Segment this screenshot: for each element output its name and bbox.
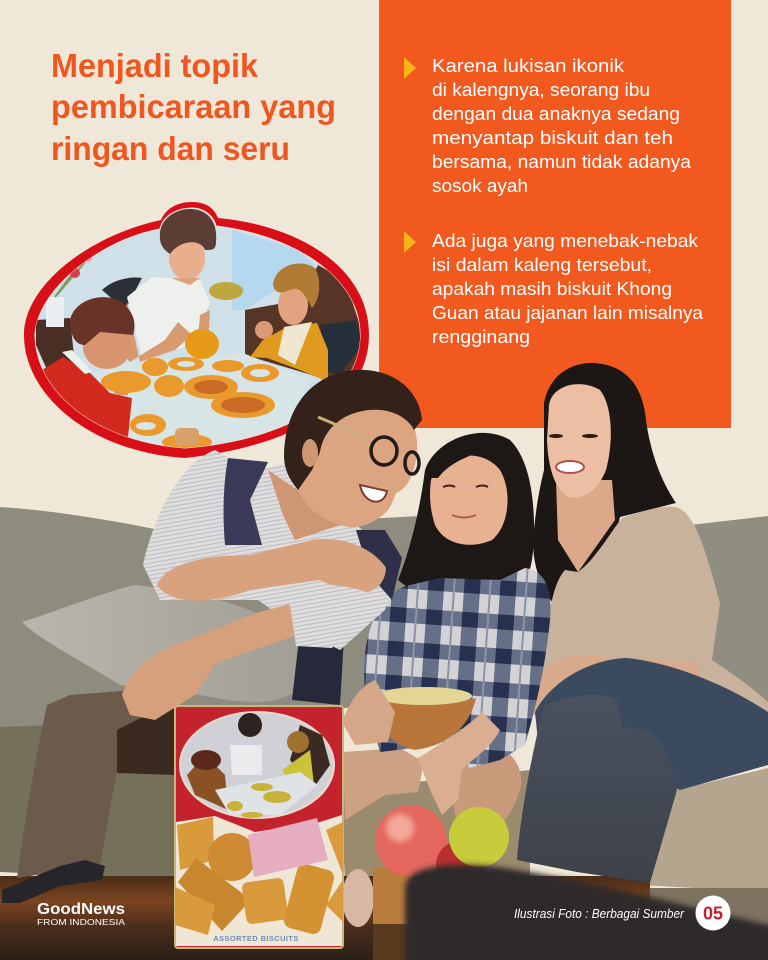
smile (360, 485, 387, 502)
icon: yellow triangle bullet (404, 231, 416, 253)
text block: first point: bersama, namun tidak adanya (432, 151, 692, 172)
sofa back right (690, 516, 768, 740)
text block: second point: rengginang (432, 326, 530, 347)
pink wafer (248, 818, 328, 877)
girl in yellow cardigan (250, 263, 328, 382)
vase and flowers (46, 254, 92, 327)
eyes (549, 434, 598, 438)
mother (123, 209, 216, 362)
hair fringe (425, 435, 512, 478)
lower arm and hand (122, 603, 303, 720)
jeans thigh (535, 658, 768, 790)
wall panel (232, 230, 315, 310)
biscuits and plates (101, 357, 279, 450)
table (0, 876, 650, 960)
plaid dress (364, 568, 551, 768)
glasses (318, 417, 419, 474)
panel: orange text background (379, 0, 731, 428)
text block: first point: menyantap biskuit dan teh (432, 127, 673, 148)
arm to knee (418, 712, 500, 815)
text block: first point: Karena lukisan ikonik (432, 55, 625, 76)
painted scene (36, 209, 365, 450)
face (547, 384, 611, 498)
blurred foreground screen (405, 865, 768, 960)
popcorn bowl (342, 680, 476, 750)
legs (343, 748, 424, 820)
text block: second point (404, 230, 704, 347)
logo: GoodNews (37, 901, 125, 927)
dark vest lower (292, 620, 345, 705)
hair (398, 433, 534, 597)
face (430, 456, 508, 545)
face (290, 403, 417, 527)
neck (268, 470, 340, 540)
dark furniture left (36, 318, 75, 372)
biscuit area (176, 815, 342, 946)
back hair (533, 363, 676, 612)
title: pembicaraan yang (51, 88, 336, 125)
mouth (556, 461, 584, 473)
man (122, 370, 422, 720)
navy vest (224, 458, 268, 545)
boy in red (42, 297, 134, 437)
text block: second point: isi dalam kaleng tersebut, (432, 254, 652, 275)
illustration: family tea oval from the tin (24, 202, 369, 458)
ear (302, 439, 318, 467)
tin family scene (187, 713, 330, 818)
biscuit tin (175, 706, 343, 948)
flowers (209, 282, 243, 300)
eyes and mouth (443, 486, 488, 518)
title (51, 47, 336, 167)
pillow (22, 585, 327, 702)
title: Menjadi topik (51, 47, 259, 84)
man's trousers (17, 690, 175, 878)
beige sweater (540, 507, 768, 765)
page number: 05 (703, 904, 723, 924)
page number (696, 896, 730, 930)
wooden fruit box (373, 868, 413, 960)
woman (517, 363, 768, 883)
jeans lower leg (517, 695, 677, 883)
teapot (185, 329, 219, 359)
text block: second point: apakah masih biskuit Khong (432, 278, 672, 299)
text block: first point: sosok ayah (432, 175, 528, 196)
dark furniture right (245, 265, 360, 377)
icon: yellow triangle bullet (404, 57, 416, 79)
apples (375, 805, 509, 889)
sofa seat middle (340, 770, 530, 880)
neck (556, 480, 615, 572)
tin label: ASSORTED BISCUITS (213, 934, 299, 943)
girl (342, 433, 551, 927)
table (130, 354, 289, 446)
logo: GoodNews: GoodNews (37, 901, 125, 918)
remote control (2, 860, 105, 903)
sofa seat right (640, 768, 768, 892)
upper arm (157, 539, 386, 601)
chair left (102, 278, 142, 306)
sofa (0, 507, 768, 892)
seat front right (650, 888, 768, 938)
chair right (320, 320, 362, 375)
photo credit: Ilustrasi Foto : Berbagai Sumber (514, 907, 685, 921)
text block: second point: Ada juga yang menebak-nebak (432, 230, 699, 251)
tin body (175, 706, 343, 948)
text block: first point (404, 55, 692, 196)
sofa seat left (0, 725, 180, 880)
oval frame (180, 712, 334, 818)
pale foot (342, 869, 374, 927)
girl hand on bowl (342, 680, 395, 745)
text block: first point: dengan dua anaknya sedang (432, 103, 680, 124)
light blue wall (35, 208, 360, 448)
logo: GoodNews: FROM INDONESIA (37, 917, 125, 927)
striped shirt body (143, 450, 400, 650)
text block: second point: Guan atau jajanan lain misalnya (432, 302, 704, 323)
forearm and hand (522, 655, 702, 718)
sofa back left (0, 507, 430, 740)
title: ringan dan seru (51, 130, 290, 167)
sleeve (260, 585, 368, 648)
text block: first point: di kalengnya, seorang ibu (432, 79, 650, 100)
biscuits (175, 817, 343, 936)
hair (284, 370, 422, 490)
teacup (175, 428, 199, 446)
red oval frame (24, 202, 369, 458)
